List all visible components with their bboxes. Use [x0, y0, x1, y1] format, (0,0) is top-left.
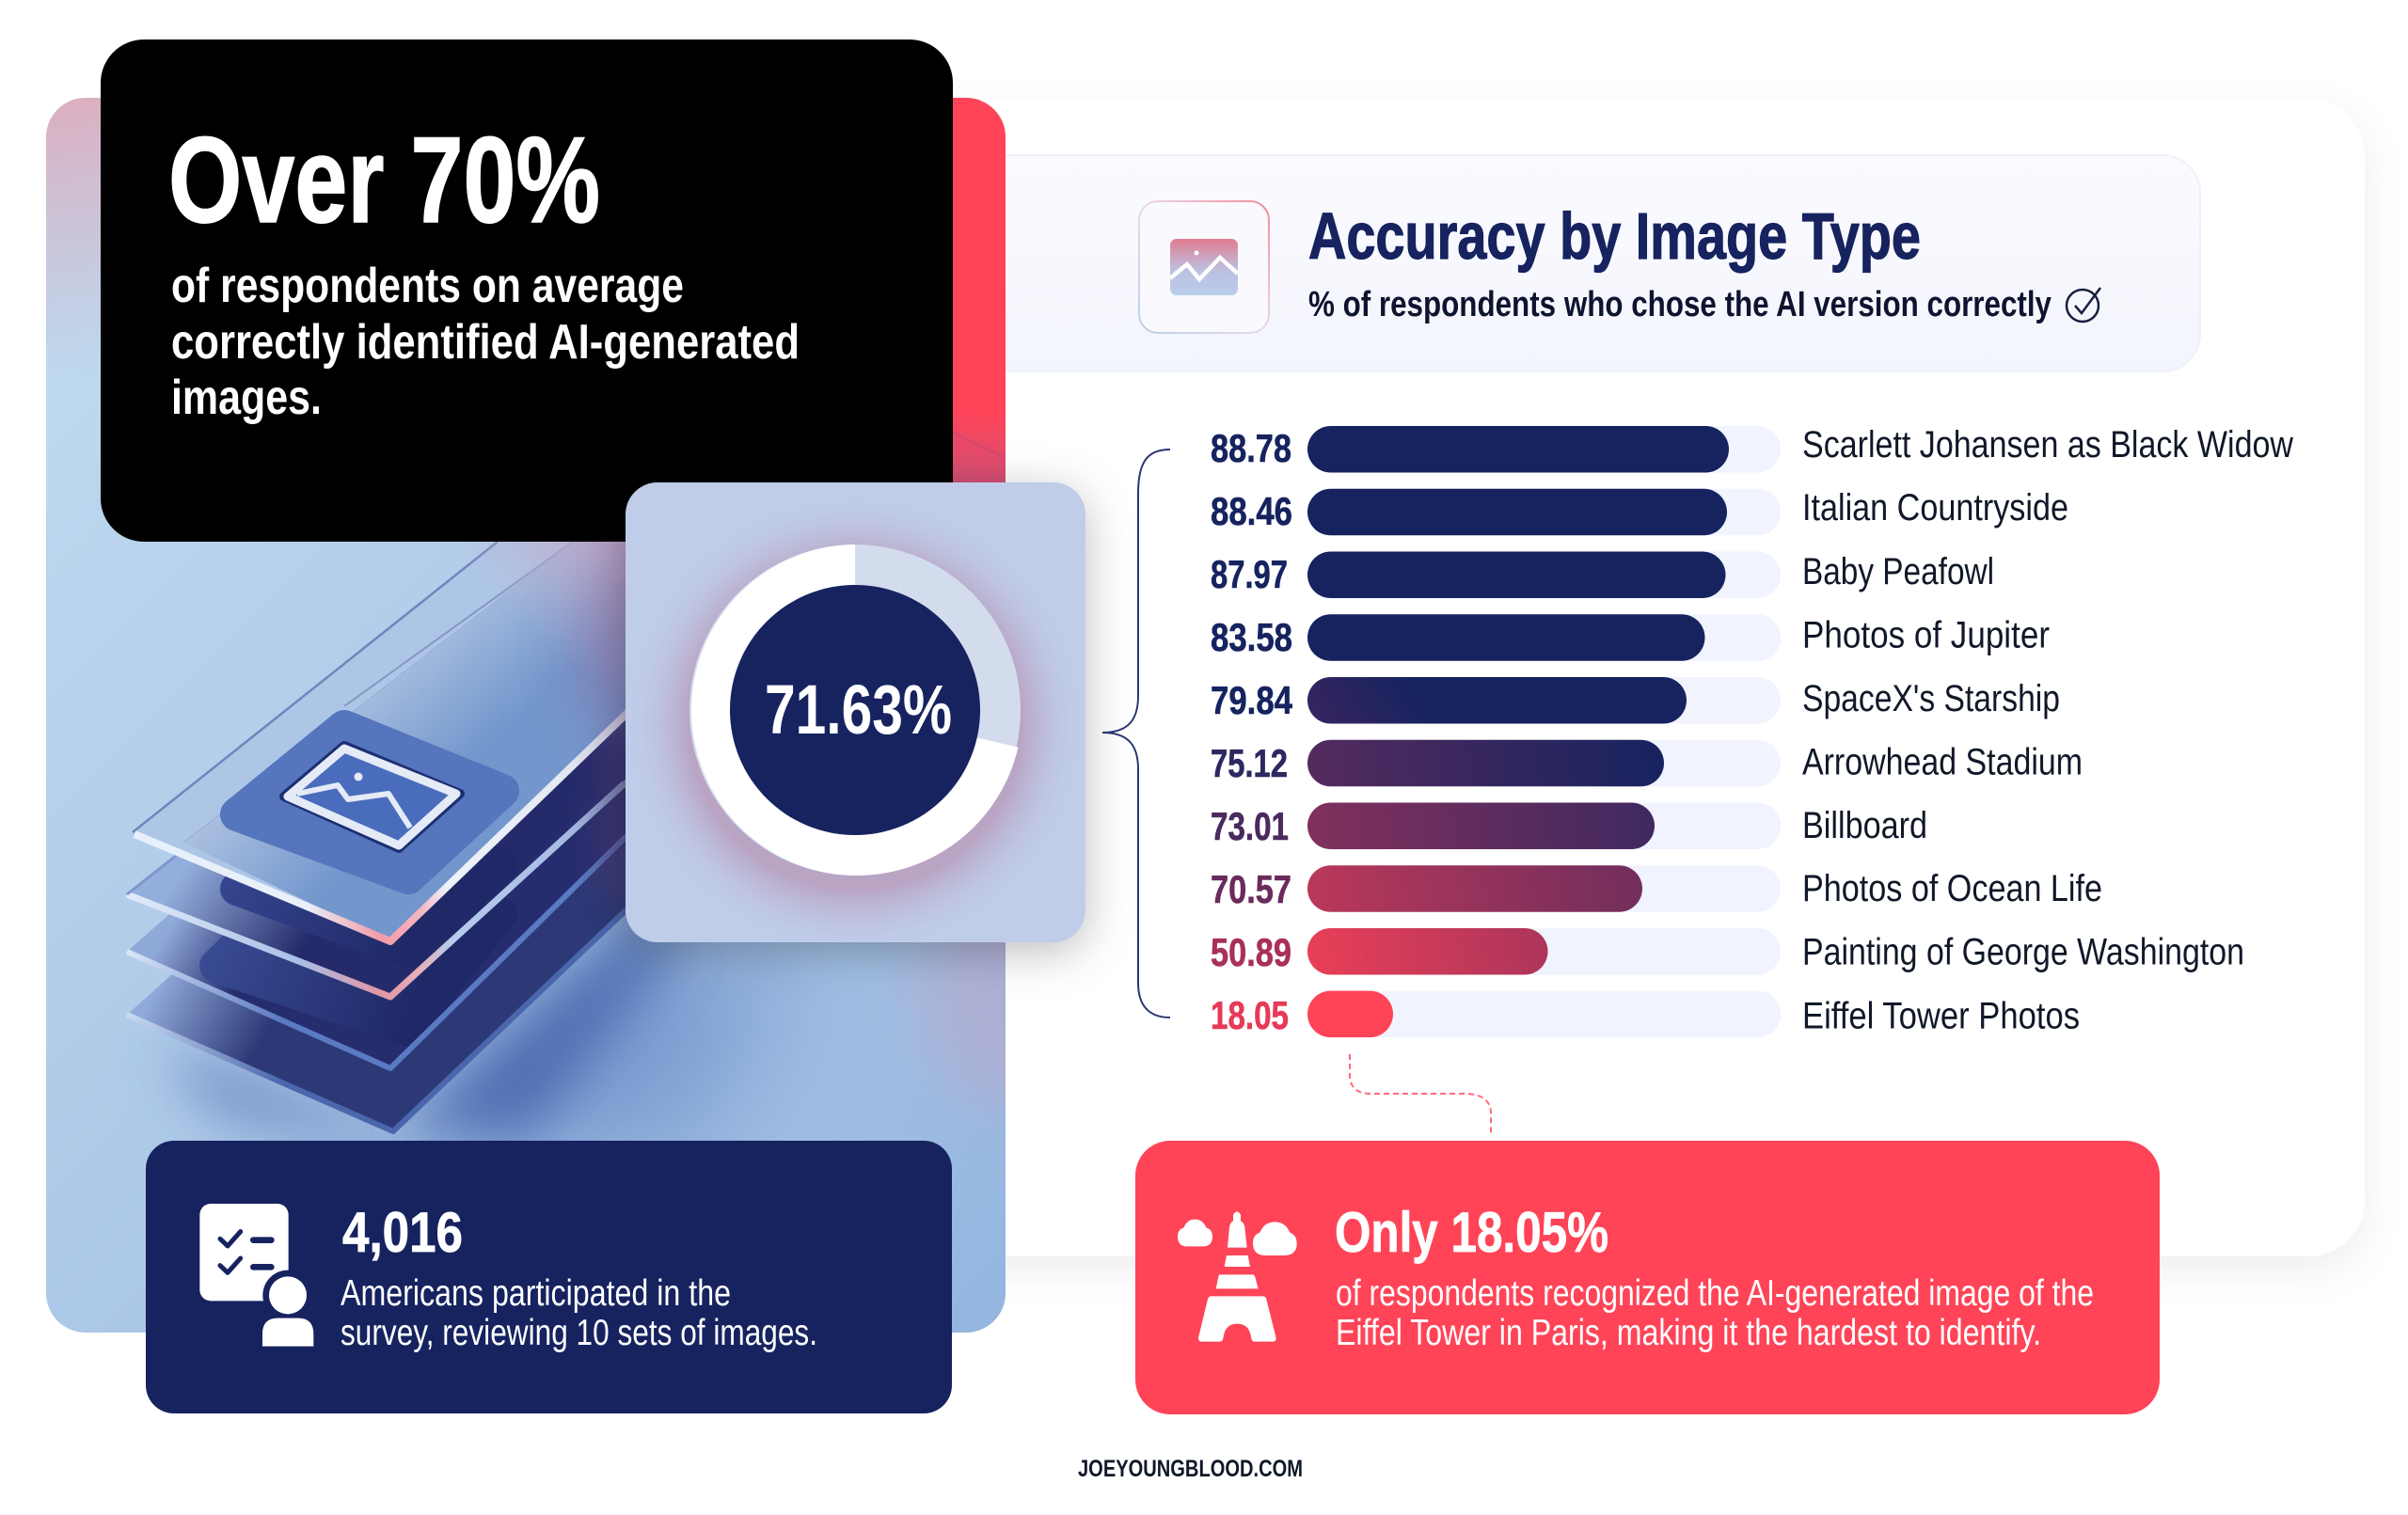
- row: italian countryside: [1211, 487, 2068, 535]
- icon: image tile on glass layers: [237, 727, 502, 877]
- icon: eiffel tower and clouds: [1178, 1211, 1297, 1342]
- row: italian countryside: 88.46: [1211, 489, 1292, 533]
- row: eiffel tower photos: 18.05: [1211, 993, 1289, 1037]
- row: baby peafowl: 87.97: [1211, 552, 1288, 596]
- row: photos of jupiter: [1211, 614, 2050, 661]
- row: arrowhead stadium: Arrowhead Stadium: [1802, 741, 2083, 782]
- donut chart: 71.63%: 71.63%: [765, 671, 952, 749]
- headline description: [171, 259, 800, 425]
- header panel: accuracy by image type: [959, 155, 2200, 371]
- footer source: JOEYOUNGBLOOD.COM: [1078, 1456, 1303, 1482]
- icon: picture frame: [1139, 201, 1269, 333]
- callout description: [1336, 1273, 2094, 1353]
- headline description: of respondents on average: [171, 259, 684, 313]
- icon: check circle: [2067, 288, 2100, 322]
- stat: only 18.05%: Only 18.05%: [1335, 1201, 1608, 1264]
- sheet 3: [130, 792, 603, 1065]
- row: eiffel tower photos: Eiffel Tower Photos: [1802, 995, 2080, 1036]
- row: billboard: [1211, 803, 1927, 849]
- headline description: correctly identified AI-generated: [171, 315, 800, 370]
- row: arrowhead stadium: 75.12: [1211, 741, 1288, 785]
- row: scarlett johansen: [1211, 424, 2293, 472]
- row: eiffel tower photos: [1211, 991, 2080, 1037]
- row: photos of ocean life: 70.57: [1211, 867, 1291, 911]
- survey description: [341, 1273, 817, 1353]
- icon: survey checklist and person: [199, 1204, 313, 1347]
- row: italian countryside: Italian Countryside: [1802, 487, 2068, 529]
- row: photos of jupiter: 83.58: [1211, 615, 1292, 659]
- headline: over 70%: Over 70%: [168, 111, 600, 248]
- row: scarlett johansen: 88.78: [1211, 426, 1291, 470]
- glow overlays: [476, 98, 1006, 668]
- survey description: Americans participated in the: [341, 1273, 731, 1314]
- sheet 1: [134, 542, 571, 909]
- headline description: images.: [171, 371, 322, 425]
- donut chart: 71.63%: [689, 544, 1021, 876]
- callout description: of respondents recognized the AI-generated image of the: [1336, 1273, 2094, 1314]
- row: baby peafowl: [1211, 551, 1994, 598]
- callout description: Eiffel Tower in Paris, making it the hardest to identify.: [1336, 1313, 2041, 1353]
- donut card: [626, 482, 1085, 942]
- accuracy heading: Accuracy by Image Type: [1308, 199, 1921, 273]
- dashed connector: [1350, 1054, 1491, 1133]
- accuracy heading: [1139, 199, 2100, 333]
- white chart panel: [894, 100, 2365, 1256]
- sheet 4: [130, 841, 626, 1128]
- row: scarlett johansen: Scarlett Johansen as Black Widow: [1802, 424, 2293, 466]
- row: photos of ocean life: [1211, 865, 2102, 912]
- row: billboard: 73.01: [1211, 804, 1289, 848]
- headline card: [101, 39, 953, 542]
- bar chart: [1211, 424, 2293, 1037]
- row: billboard: Billboard: [1802, 805, 1927, 846]
- sheet 2: [132, 856, 378, 984]
- row: spacex starship: [1211, 677, 2060, 724]
- accuracy heading: % of respondents who chose the AI version correctly: [1308, 285, 2052, 324]
- row: photos of jupiter: Photos of Jupiter: [1802, 615, 2050, 656]
- row: spacex starship: SpaceX's Starship: [1802, 678, 2060, 719]
- row: painting of george washington: Painting of George Washington: [1802, 931, 2244, 972]
- row: spacex starship: 79.84: [1211, 678, 1293, 722]
- stat: 4,016: 4,016: [342, 1201, 463, 1264]
- survey card: [146, 1141, 952, 1413]
- bracket: [1102, 450, 1170, 1018]
- row: painting of george washington: 50.89: [1211, 930, 1291, 974]
- left illustration panel: [46, 98, 1006, 1333]
- row: photos of ocean life: Photos of Ocean Life: [1802, 868, 2102, 909]
- survey description: survey, reviewing 10 sets of images.: [341, 1313, 817, 1353]
- row: painting of george washington: [1211, 928, 2244, 974]
- eiffel tower callout: [1135, 1141, 2160, 1414]
- row: arrowhead stadium: [1211, 740, 2083, 786]
- row: baby peafowl: Baby Peafowl: [1802, 551, 1994, 592]
